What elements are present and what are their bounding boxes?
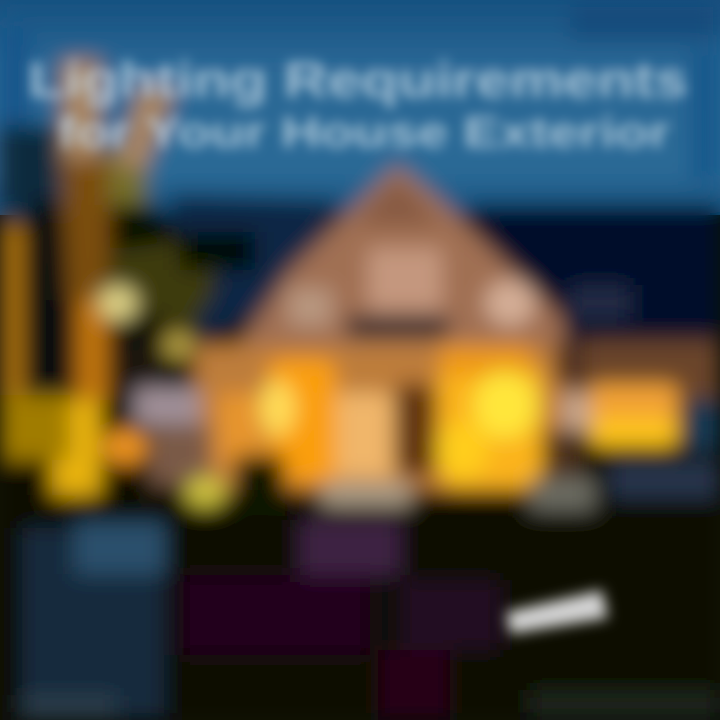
title line 1: Lighting Requirements [28, 52, 688, 108]
house body [135, 340, 595, 500]
house [135, 165, 720, 514]
title [28, 52, 688, 157]
title line 2: for Your House Exterior [58, 108, 670, 157]
stone path block [22, 522, 165, 720]
side wing lit window [590, 384, 678, 446]
porch step [322, 482, 410, 506]
foreground shrubs and flowers [0, 455, 720, 720]
white garden light [506, 590, 608, 634]
roof [215, 165, 720, 400]
background: dark hills [170, 195, 720, 498]
right lit window [436, 345, 542, 488]
tree with golden lights [0, 60, 255, 495]
door [394, 384, 436, 476]
left lit window [260, 358, 336, 482]
